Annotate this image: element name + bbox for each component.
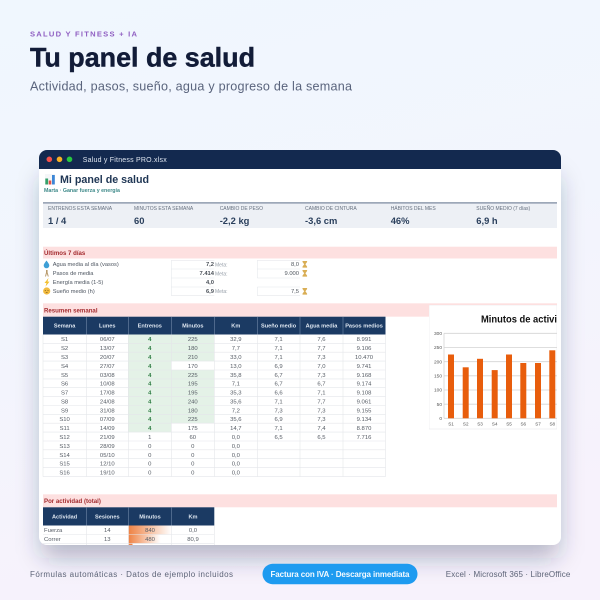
table rows: 7,1 [274,355,283,361]
table rows: 7,1 [317,390,326,396]
table rows: 35,3 [230,390,242,396]
table rows: S15 [59,462,71,468]
activity table: Minutos [139,514,161,520]
table rows: 7,7 [232,346,240,352]
last 7 days metrics: Meta: [215,289,228,295]
bars [448,350,555,418]
header block [30,30,352,94]
table header: Lunes [99,324,116,330]
subtitle: Actividad, pasos, sueño, agua y progreso de la semana [30,80,352,94]
icons: hourglasses [302,261,307,295]
table rows: S13 [59,444,71,450]
KPI band [43,202,557,228]
table rows: 0 [191,453,195,459]
table rows: 9.108 [357,390,372,396]
activity table: Fuerza [44,528,63,534]
table rows: 33,0 [230,355,242,361]
table header: Km [231,324,240,330]
y axis labels: 150 [434,374,442,380]
table rows: S5 [61,373,69,379]
last 7 days metrics: 7.414 [199,271,215,277]
y axis labels: 250 [434,345,442,351]
table rows: 12/10 [100,462,115,468]
last 7 days metrics: 8,0 [291,262,299,268]
table rows: 05/10 [100,453,115,459]
table rows: 0,0 [232,470,241,476]
table header: Minutos [182,324,204,330]
spreadsheet window [39,150,561,545]
table rows: 7,4 [317,426,326,432]
table rows: 225 [188,373,198,379]
table rows: 6,7 [317,382,326,388]
table rows: 10.470 [355,355,374,361]
table rows: 14,7 [230,426,242,432]
activity table [43,507,214,545]
y axis labels: 0 [439,416,442,422]
table rows: S14 [59,453,71,459]
table rows: 0 [148,462,152,468]
table grid [43,334,386,477]
section: resumen semanal [43,303,557,317]
table rows: 03/08 [100,373,115,379]
table rows: 7,1 [274,337,283,343]
table rows: 4 [148,399,152,405]
table rows: 6,9 [274,417,283,423]
last 7 days metrics: Pasos de media [53,271,94,277]
KPI band: 46% [391,215,410,226]
table rows: 7,7 [317,399,326,405]
table rows: 14/09 [100,426,115,432]
table rows: 6,7 [274,373,283,379]
table rows: 35,6 [230,399,242,405]
eyebrow: SALUD Y FITNESS + IA [30,30,138,39]
icon: walker [45,270,49,276]
table rows: 9.174 [357,382,372,388]
activity table: 14 [104,528,111,534]
section: últimos 7 días: Últimos 7 días [44,250,86,257]
x axis labels: S5 [506,422,512,426]
table rows: 7,3 [317,408,326,414]
bar chart: minutos de actividad [429,305,557,429]
table rows: 7,1 [274,399,283,405]
table rows: 8.870 [357,426,372,432]
section: por actividad [43,494,557,507]
table rows: S9 [61,408,68,414]
icon: sleeping face [43,287,50,295]
last 7 days metrics [43,260,307,296]
table rows: 210 [188,355,198,361]
section: últimos 7 días [43,247,557,258]
table header: Sueño medio [261,324,297,330]
table rows: 170 [188,364,198,370]
activity table: 480 [145,537,156,543]
table rows: 195 [188,390,198,396]
table rows: 20/07 [100,355,115,361]
icon: lightning [44,278,50,287]
table rows: 7,1 [274,426,283,432]
table rows: 24/08 [100,399,115,405]
table rows: 10/08 [100,382,115,388]
table rows: 0,0 [232,435,241,441]
table rows: 13,0 [230,364,242,370]
table rows: 0,0 [232,444,241,450]
table rows [59,337,374,476]
last 7 days metrics: 4,0 [206,280,214,286]
window title bar [39,150,561,169]
table rows: 17/08 [100,390,115,396]
table rows: 7,3 [274,408,283,414]
last 7 days metrics: 9.000 [284,271,299,277]
last 7 days metrics: Sueño medio (h) [53,289,95,295]
table rows: 9.106 [357,346,372,352]
table rows: 06/07 [100,337,115,343]
table rows: 7,2 [232,408,240,414]
KPI band: 1 / 4 [48,215,67,226]
icon: water drop [44,260,49,268]
window title bar: Salud y Fitness PRO.xlsx [83,157,167,164]
table rows: 4 [148,408,152,414]
last 7 days metrics: Meta: [215,271,228,277]
table rows: 6,5 [274,435,283,441]
last 7 days metrics: 7,2 [206,262,214,268]
table rows: 0 [191,470,195,476]
activity table: Correr [44,537,61,543]
activity table: Km [188,514,198,520]
KPI band: CAMBIO DE PESO [220,206,263,212]
table rows: 7,0 [317,364,326,370]
table rows: 175 [188,426,198,432]
KPI band: ENTRENOS ESTA SEMANA [48,206,113,212]
table rows: 7,3 [317,355,326,361]
activity table: 840 [145,528,156,534]
last 7 days metrics: 7,5 [291,289,299,295]
title: Tu panel de salud [30,43,255,73]
section: por actividad: Por actividad (total) [44,498,101,505]
section: resumen semanal: Resumen semanal [44,308,98,315]
y axis labels: 200 [434,359,442,365]
table header: Pasos medios [345,324,383,330]
table rows: 7,3 [317,373,326,379]
table rows: 35,6 [230,417,242,423]
x axis labels: S2 [463,422,469,426]
table rows: 4 [148,382,152,388]
table rows: 8.991 [357,337,371,343]
table rows: 7,3 [317,417,326,423]
footer pill [262,564,418,584]
table rows: S6 [61,382,69,388]
KPI band: -3,6 cm [305,215,337,226]
x axis labels: S3 [477,422,483,426]
table rows: 07/09 [100,417,115,423]
activity table: 80,9 [187,537,199,543]
table rows: S2 [61,346,68,352]
activity table: Actividad [52,514,78,520]
table rows: 4 [148,337,152,343]
table rows: 0 [148,444,152,450]
table rows: 28/09 [100,444,115,450]
table rows: 0,0 [232,453,241,459]
y axis labels: 300 [434,331,442,337]
table rows: 180 [188,408,198,414]
table header: Semana [54,324,76,330]
table rows: 6,5 [317,435,326,441]
table rows: 6,7 [274,382,283,388]
last 7 days metrics: Meta: [215,262,228,268]
KPI band: 60 [134,215,144,226]
table rows: 9.741 [357,364,371,370]
footer left text: Fórmulas automáticas · Datos de ejemplo incluidos [30,570,233,579]
KPI band: MINUTOS ESTA SEMANA [134,206,194,212]
footer right text: Excel · Microsoft 365 · LibreOffice [446,570,571,579]
table rows: 7,7 [317,346,326,352]
table rows: 0 [148,470,152,476]
table rows: 60 [190,435,197,441]
table rows: S11 [60,426,70,432]
activity table: 0,0 [189,528,198,534]
table rows: 13/07 [100,346,115,352]
y axis labels: 50 [437,402,442,408]
table rows: 9.168 [357,373,372,379]
table rows: S1 [61,337,68,343]
table rows: 7.716 [357,435,372,441]
table rows: S4 [61,364,69,370]
table rows: S10 [59,417,71,423]
table rows: 7,6 [317,337,326,343]
green highlighted cells [128,334,214,432]
footer pill: Factura con IVA · Descarga inmediata [270,570,410,579]
table rows: 4 [148,390,152,396]
sheet title: Mi panel de salud [60,174,149,186]
x axis labels: S8 [549,422,556,426]
table rows: S3 [61,355,69,361]
icon: bar chart [45,174,55,184]
table header [43,317,386,334]
y axis labels: 100 [434,388,442,394]
table rows: 4 [148,364,152,370]
sheet subtitle: Marta · Ganar fuerza y energía [44,188,120,194]
table rows: S8 [61,399,69,405]
table rows: 1 [148,435,151,441]
chart title: Minutos de activi [481,315,557,326]
x axis labels [448,422,555,426]
table rows: 4 [148,426,152,432]
table rows: S12 [59,435,70,441]
table rows: 180 [188,346,198,352]
footer [30,564,571,584]
table rows: S16 [59,470,71,476]
KPI band: -2,2 kg [220,215,250,226]
table rows: 9.061 [357,399,371,405]
table rows: 9.134 [357,417,372,423]
table rows: 0 [148,453,152,459]
table rows: 0 [191,462,195,468]
table rows: 240 [188,399,198,405]
table rows: 225 [188,337,198,343]
table rows: 27/07 [100,364,115,370]
weekly summary table [43,317,386,477]
table rows: 4 [148,346,152,352]
table rows: 32,9 [230,337,242,343]
table rows: 9.155 [357,408,372,414]
x axis labels: S7 [535,422,541,426]
table rows: 0,0 [232,462,241,468]
table rows: 31/08 [100,408,115,414]
KPI band: CAMBIO DE CINTURA [305,206,357,212]
activity table: 13 [104,537,111,543]
table header: Agua media [306,324,338,330]
table rows: 19/10 [100,470,115,476]
KPI band: SUEÑO MEDIO (7 días) [476,205,531,212]
x axis labels: S1 [448,422,454,426]
last 7 days metrics: Energía media (1-5) [53,280,103,286]
table rows: 195 [188,382,198,388]
table rows: 21/09 [100,435,115,441]
y axis labels [434,331,442,422]
activity table: Sesiones [95,514,120,520]
table rows: S7 [61,390,68,396]
table rows: 4 [148,417,152,423]
x axis labels: S4 [492,422,498,426]
last 7 days metrics: 6,9 [206,289,215,295]
table rows: 4 [148,355,152,361]
KPI band: HÁBITOS DEL MES [391,205,436,212]
table rows: 225 [188,417,198,423]
table header: Entrenos [138,324,162,330]
last 7 days metrics: Agua media al día (vasos) [53,262,119,268]
table rows: 6,9 [274,364,283,370]
x axis labels: S6 [520,422,527,426]
table rows: 4 [148,373,152,379]
KPI band: 6,9 h [476,215,498,226]
table rows: 0 [191,444,195,450]
table rows: 35,8 [230,373,242,379]
table rows: 6,6 [274,390,283,396]
table rows: 7,1 [274,346,283,352]
table rows: 7,1 [232,382,240,388]
